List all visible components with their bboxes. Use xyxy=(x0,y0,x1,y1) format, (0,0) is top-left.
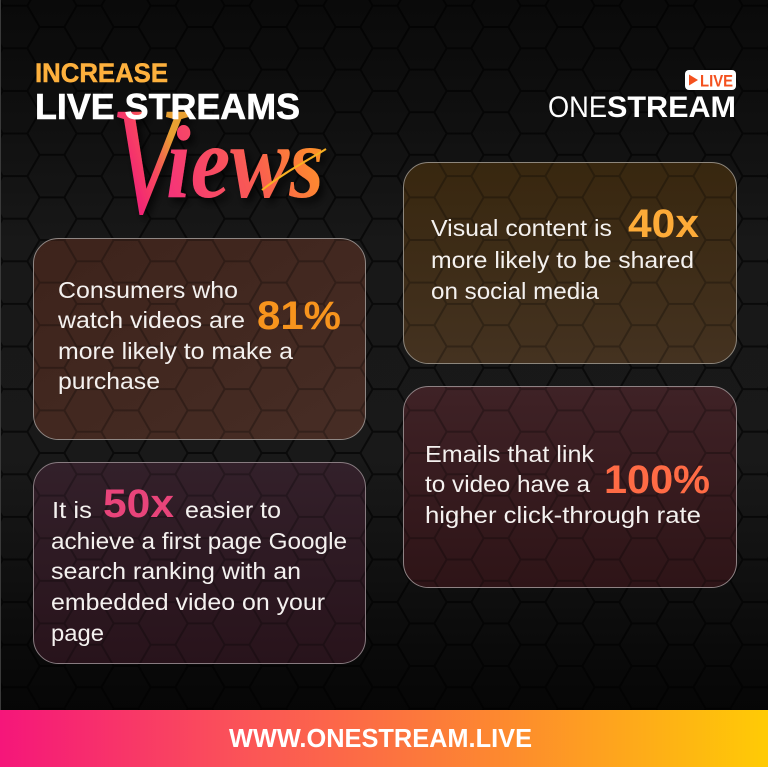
panel: consumers xyxy=(34,238,366,440)
text: consumers: purchase xyxy=(58,368,160,394)
footer url: WWW.ONESTREAM.LIVE xyxy=(229,723,532,753)
script word: views: V xyxy=(112,77,189,245)
text: visual content xyxy=(431,215,694,304)
text: google ranking: page xyxy=(51,620,104,646)
panel: visual content xyxy=(404,162,736,364)
live badge: LIVE xyxy=(700,72,733,90)
text: google ranking: achieve a first page Google xyxy=(51,528,347,554)
script word: views xyxy=(112,77,326,245)
wordmark: ONESTREAM xyxy=(548,91,736,124)
text: emails: higher click-through rate xyxy=(425,502,701,528)
text: visual content: more likely to be shared xyxy=(431,247,694,273)
script word: views: iews xyxy=(166,105,324,220)
logo: onestream live xyxy=(548,70,736,124)
title xyxy=(35,58,326,245)
text: consumers: more likely to make a xyxy=(58,338,294,364)
stat: 40x: 40x xyxy=(628,202,699,246)
text: google ranking: easier to xyxy=(185,497,281,523)
heading: live streams: LIVE STREAMS xyxy=(35,86,300,127)
text: emails: to video have a xyxy=(425,471,591,497)
panel: google ranking xyxy=(34,462,366,664)
text: consumers: watch videos are xyxy=(57,307,245,333)
live badge xyxy=(685,70,736,90)
footer band xyxy=(0,710,768,767)
text: google ranking: embedded video on your xyxy=(51,589,325,615)
stat: 50x: 50x xyxy=(103,482,174,526)
panel: emails xyxy=(404,386,736,588)
text: google ranking: search ranking with an xyxy=(51,558,301,584)
heading: increase: INCREASE xyxy=(35,58,168,88)
stat: 100%: 100% xyxy=(604,458,710,502)
text: visual content: Visual content is xyxy=(431,215,612,241)
text: consumers xyxy=(57,277,294,394)
text: emails: Emails that link xyxy=(425,441,594,467)
text: google ranking xyxy=(51,497,347,646)
stat: 81%: 81% xyxy=(257,294,341,338)
text: consumers: Consumers who xyxy=(58,277,238,303)
text: google ranking: It is xyxy=(52,497,92,523)
text: emails xyxy=(425,441,701,528)
text: visual content: on social media xyxy=(431,278,600,304)
